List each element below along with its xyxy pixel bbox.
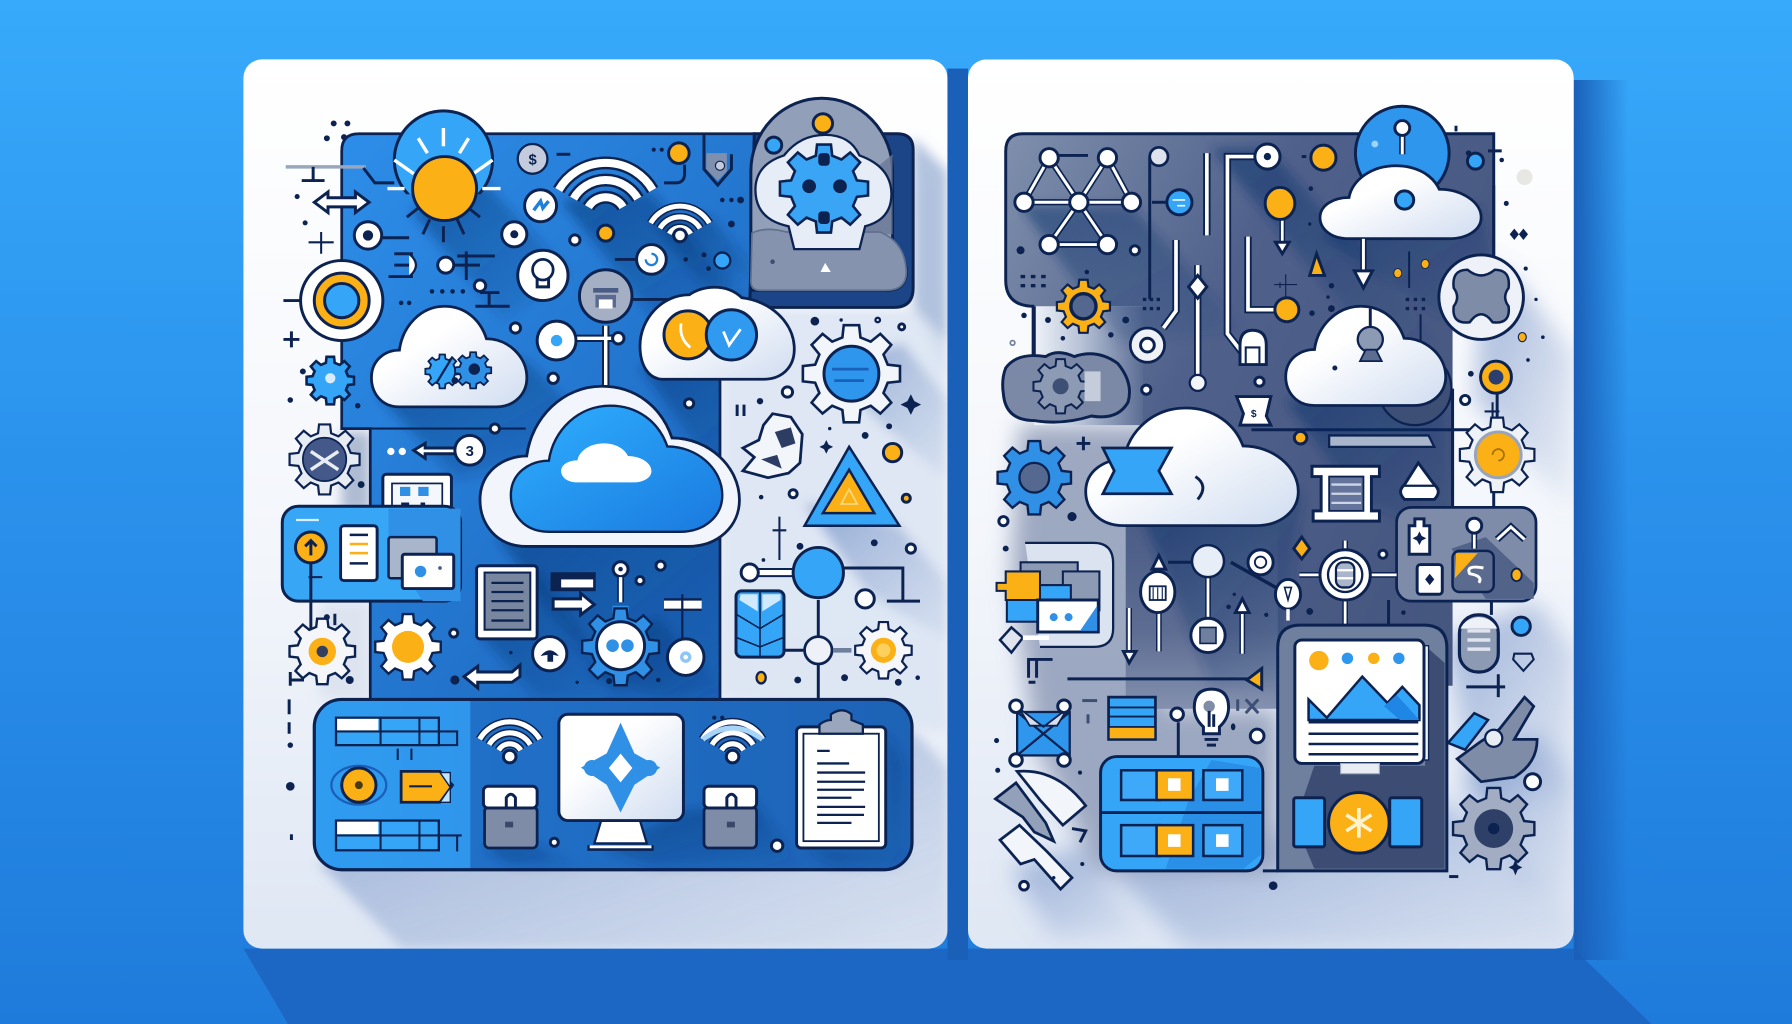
panel: blue control panel: [1101, 757, 1278, 871]
icon: arrow bars: [552, 574, 594, 615]
blue gear: [780, 145, 868, 233]
orange nodes and arrow: [1248, 145, 1429, 343]
top-left dots and connector marks: [286, 120, 394, 408]
connector right line: [1451, 430, 1454, 506]
left dashed marks: [286, 614, 335, 840]
icon: gray tool: [1448, 697, 1541, 790]
icon: eye connector: [510, 321, 694, 408]
icon: gray gear: [1449, 788, 1534, 877]
plus: [1077, 437, 1090, 450]
icon: dollar coin: [518, 144, 570, 174]
icon: pill and side elements: [1459, 601, 1534, 697]
icon: padlock right: [550, 786, 783, 851]
small arrow row with key: [387, 424, 499, 465]
icon: key pin: [613, 561, 665, 602]
white cloud behind gear: [755, 135, 891, 249]
panel: gray gear block: [750, 98, 913, 307]
card background: [243, 59, 947, 949]
icon: bottom wifi left: [480, 722, 540, 763]
long shadows on right card: [1011, 263, 1574, 949]
icon: monitor with node: [559, 714, 683, 848]
icon: clipboard: [797, 710, 886, 848]
icon: blue dome with pin: [1355, 106, 1449, 200]
small dots around gear: [1010, 313, 1264, 394]
gray bubble on panel: [579, 270, 750, 322]
table: top: [336, 718, 457, 760]
plus mark: [283, 331, 299, 347]
icon: bottom wifi right: [702, 716, 763, 763]
table: bottom: [336, 821, 462, 851]
icon: stacked bars: [1109, 697, 1155, 739]
icon: book: [736, 591, 784, 657]
flow icons: arrows and nodes: [1123, 545, 1249, 663]
icon: round badge: [509, 637, 661, 684]
circuit column: [1130, 147, 1207, 391]
icon: blue gear: [998, 441, 1077, 526]
icon: blue gear with face: [582, 606, 659, 685]
panel inner shadows: [376, 181, 749, 698]
panel: small gray panel: [1397, 491, 1536, 601]
icon: big cloud with bow tie: [1086, 408, 1298, 526]
panel: light blue mini dashboard: [282, 506, 461, 635]
icon: top cloud: [1320, 166, 1481, 239]
icon: dollar coin: $: [528, 153, 537, 169]
right side scattered elements: [737, 317, 921, 562]
slate panel inner shadows: [1021, 149, 1497, 686]
icon: broken puzzle shape: [743, 414, 802, 478]
icon: large wifi: [559, 163, 653, 241]
icon: cloud with two coins: [640, 287, 794, 379]
icon: double arrow: [314, 192, 369, 213]
icon: target ring: [283, 261, 383, 341]
icon: window box: [383, 474, 451, 520]
icon: main blue cloud: [480, 386, 739, 546]
small arrow row with key: 3: [466, 444, 474, 460]
blue blocks and orange star: [1294, 793, 1422, 853]
icon: small wifi: [651, 206, 709, 242]
pin above blue panel: [1171, 708, 1183, 759]
bottom panel inner shadows: [483, 731, 905, 866]
icon: tablet document: [477, 566, 537, 639]
panel: device with landscape: [1278, 625, 1447, 871]
icon: flag label: $: [1251, 409, 1257, 420]
icon: gray gear: [290, 424, 365, 494]
panel: right card: [968, 59, 1574, 949]
icon: gray X badge: [1439, 255, 1523, 339]
icon: window stack panel: [997, 543, 1113, 682]
icon: arrow line with orange pointer: [1067, 669, 1262, 689]
icon: small house shape: [1401, 463, 1438, 499]
icon: orange dot: [883, 443, 902, 462]
icon: keyhole badge: [518, 250, 568, 301]
icon: orange ring with tag: [331, 766, 453, 805]
small round icons on panel: [354, 190, 744, 274]
bar and orange dot: [1294, 431, 1434, 447]
icon: mid cloud with pin: [1286, 306, 1451, 425]
icon: gray blob with gear: [1003, 306, 1130, 422]
icon: X box: [994, 700, 1097, 766]
icon: orange gear: [1057, 280, 1110, 333]
icon: light bulb: [1194, 689, 1264, 745]
circuit marks: [389, 251, 510, 306]
panel: bottom blue panel: [314, 699, 912, 870]
icon: white gear with orange core: [375, 614, 459, 685]
icon: shield tag: [704, 134, 731, 185]
icon: sun with blue dome: [387, 111, 501, 242]
icon: warning triangle: [805, 447, 899, 526]
crosshair group: [1231, 537, 1406, 625]
icon: small blue gear: [307, 357, 354, 404]
icon: orange node with connector: [652, 143, 689, 183]
icon: left white gear with orange core: [290, 619, 357, 684]
screen: [1295, 640, 1429, 774]
bracket with lock: [1227, 144, 1280, 365]
icon: frame: [1312, 466, 1379, 521]
icon: arrow from cloud: [1354, 239, 1373, 288]
panel: left card: [243, 59, 947, 949]
icon: flag label: [1237, 397, 1271, 425]
orange ring with line: [1461, 333, 1545, 429]
right top scattered marks: [1456, 126, 1538, 301]
card background: [968, 59, 1574, 949]
long shadows on left card: [318, 137, 947, 949]
icon: bar with pendant node: [664, 594, 704, 675]
icon: broken wrench: [995, 768, 1277, 890]
network with blue hub: [741, 547, 920, 699]
icon: gear with blue core: [803, 325, 900, 422]
icon: small orange gear: [855, 622, 912, 679]
icon: cloud with gears: [371, 306, 527, 407]
right slate panel: [1006, 134, 1497, 709]
icon: network graph: [1015, 149, 1141, 286]
icon: gear with orange core: [1460, 418, 1534, 492]
icon: double arrow lower: [464, 665, 520, 688]
left blue panel: [342, 134, 794, 699]
small dots right: [757, 672, 920, 686]
icon: padlock left: [483, 786, 537, 848]
